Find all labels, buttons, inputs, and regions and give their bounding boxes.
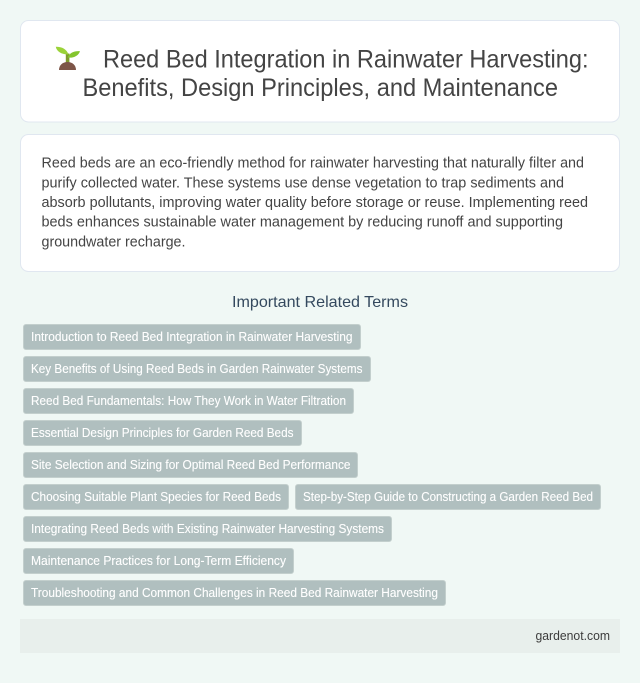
tag 2: Key Benefits of Using Reed Beds in Garden Rainwater Systems xyxy=(31,362,362,376)
tag 6 xyxy=(24,484,288,510)
tag 6: Choosing Suitable Plant Species for Reed Beds xyxy=(31,490,281,504)
icon: seedling xyxy=(56,47,80,70)
heading: important related terms: Important Related Terms xyxy=(232,294,408,311)
text block: description: groundwater recharge. xyxy=(42,234,186,250)
tag 8: Integrating Reed Beds with Existing Rainwater Harvesting Systems xyxy=(31,522,384,536)
tag 2 xyxy=(24,356,370,382)
title xyxy=(82,46,588,102)
text block: description: Reed beds are an eco-friendly method for rainwater harvesting that naturally filter and xyxy=(42,156,584,172)
footer xyxy=(20,619,620,653)
text block: description: beds enhances sustainable water management by reducing runoff and supporting xyxy=(42,214,563,230)
tag 10: Troubleshooting and Common Challenges in Reed Bed Rainwater Harvesting xyxy=(31,586,438,600)
footer: gardenot.com xyxy=(536,629,610,643)
tag 8 xyxy=(24,516,392,542)
tag 9 xyxy=(24,548,294,574)
tag list xyxy=(24,324,600,606)
tag 10 xyxy=(24,580,446,606)
tag 5 xyxy=(24,452,358,478)
panel: title card xyxy=(20,20,620,122)
text block: description: absorb pollutants, improving water quality before storage or reuse. Implementing reed xyxy=(42,195,588,211)
tag 3 xyxy=(24,388,354,414)
tag 4 xyxy=(24,420,302,446)
tag 7 xyxy=(296,484,600,510)
text block: description: purify collected water. These systems use dense vegetation to trap sediments and xyxy=(42,176,564,192)
text block: description xyxy=(42,156,588,250)
tag 9: Maintenance Practices for Long-Term Efficiency xyxy=(31,554,287,568)
title: Reed Bed Integration in Rainwater Harvesting: xyxy=(103,46,588,74)
tag 1 xyxy=(24,324,360,350)
tag 4: Essential Design Principles for Garden Reed Beds xyxy=(31,426,294,440)
tag 1: Introduction to Reed Bed Integration in Rainwater Harvesting xyxy=(31,330,353,344)
title: Benefits, Design Principles, and Maintenance xyxy=(82,74,558,102)
tag 5: Site Selection and Sizing for Optimal Reed Bed Performance xyxy=(31,458,351,472)
tag 3: Reed Bed Fundamentals: How They Work in Water Filtration xyxy=(31,394,346,408)
panel: description card xyxy=(20,134,620,272)
tag 7: Step-by-Step Guide to Constructing a Garden Reed Bed xyxy=(303,490,593,504)
